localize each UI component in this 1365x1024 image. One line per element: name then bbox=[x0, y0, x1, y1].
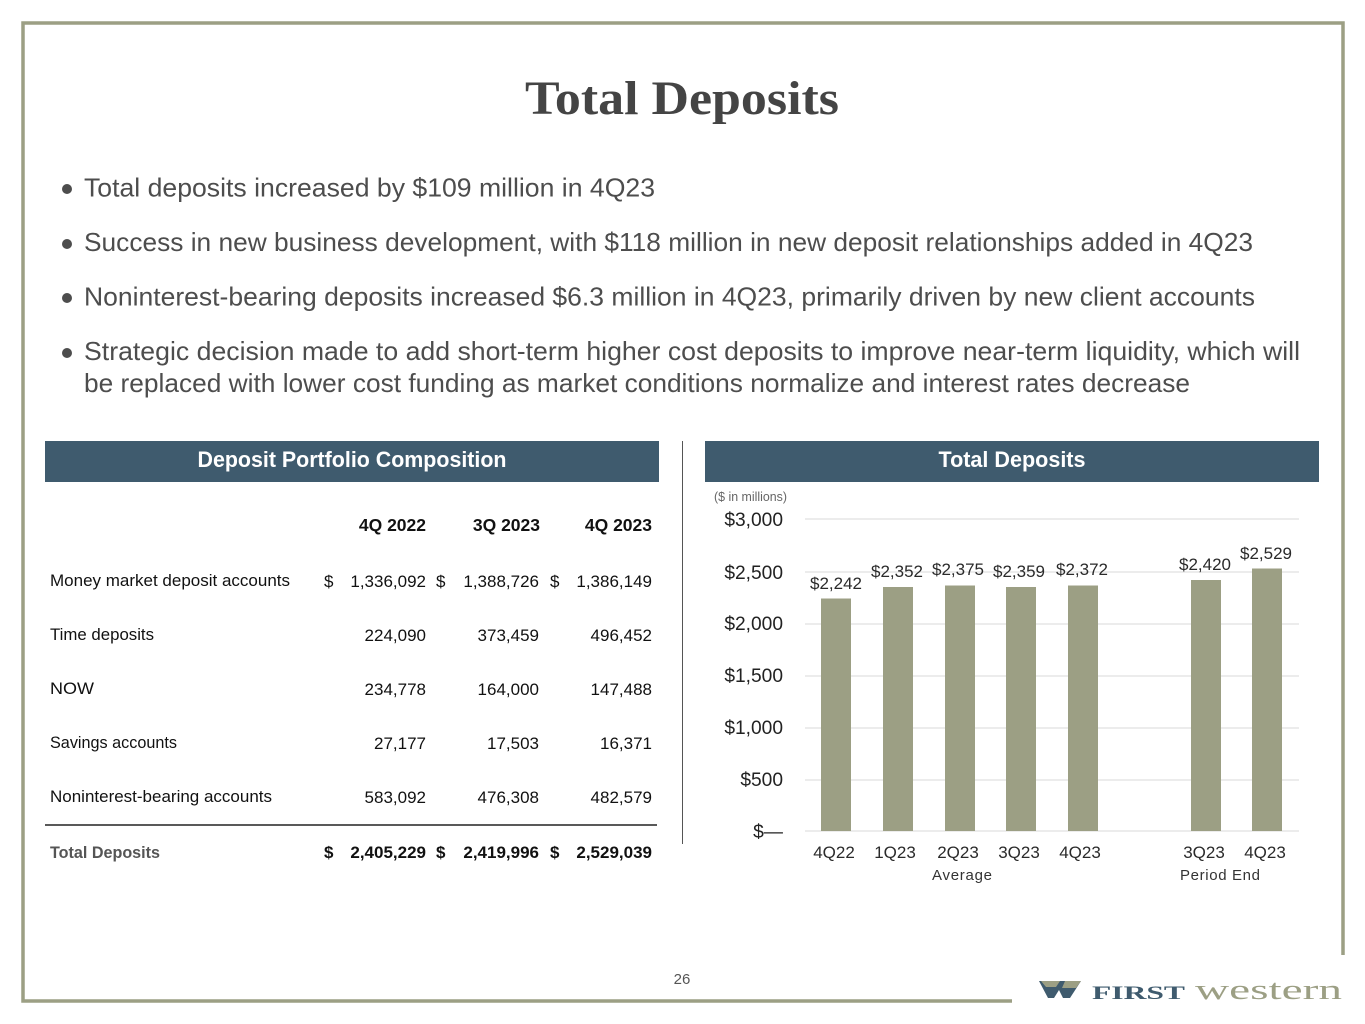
row: time deposits bbox=[50, 626, 652, 645]
y axis labels: $— bbox=[753, 822, 784, 843]
y axis labels: $1,000 bbox=[724, 718, 783, 739]
row: noninterest-bearing bbox=[50, 788, 652, 807]
logo wordmark: western bbox=[1195, 974, 1343, 1006]
bullet 3: Noninterest-bearing deposits increased $6.3 million in 4Q23, primarily driven by new client accounts bbox=[84, 282, 1255, 312]
bullet 4: Strategic decision made to add short-term higher cost deposits to improve near-term liquidity, which will bbox=[84, 336, 1300, 366]
row: savings: 17,503 bbox=[487, 734, 539, 753]
row: noninterest-bearing: 482,579 bbox=[591, 788, 652, 807]
bullet list bbox=[62, 172, 1300, 398]
panel header: Total Deposits bbox=[938, 447, 1086, 472]
bullet 2: Success in new business development, with $118 million in new deposit relationships added in 4Q23 bbox=[84, 227, 1253, 257]
y axis labels bbox=[724, 510, 784, 843]
row: money market: $ bbox=[324, 572, 334, 591]
row: total deposits: $ bbox=[436, 843, 446, 862]
bar value labels: $2,359 bbox=[993, 562, 1045, 581]
row: total deposits: $ bbox=[324, 843, 334, 862]
x axis labels: 2Q23 bbox=[937, 843, 979, 862]
y axis labels: $500 bbox=[740, 770, 783, 791]
row: money market: 1,336,092 bbox=[350, 572, 426, 591]
y axis labels: $2,500 bbox=[724, 563, 783, 584]
row: noninterest-bearing: Noninterest-bearing accounts bbox=[50, 788, 272, 806]
row: money market: Money market deposit accounts bbox=[50, 572, 290, 590]
bullet 4 bbox=[62, 336, 1300, 398]
logo: First Western bbox=[1039, 974, 1343, 1006]
logo wordmark: FIRST bbox=[1092, 983, 1186, 1004]
bar value labels: $2,529 bbox=[1240, 544, 1292, 563]
row: time deposits: 373,459 bbox=[478, 626, 539, 645]
bar value labels: $2,242 bbox=[810, 574, 862, 593]
logo wordmark bbox=[1092, 974, 1343, 1006]
bar value labels: $2,372 bbox=[1056, 560, 1108, 579]
panel: deposit portfolio composition bbox=[45, 441, 659, 862]
bullet 1: Total deposits increased by $109 million in 4Q23 bbox=[84, 172, 655, 202]
row: savings: 16,371 bbox=[600, 734, 652, 753]
row: NOW: 234,778 bbox=[365, 680, 426, 699]
row: savings bbox=[50, 734, 652, 753]
row: total deposits bbox=[50, 843, 652, 862]
bar value labels: $2,420 bbox=[1179, 555, 1231, 574]
row: NOW: 164,000 bbox=[478, 680, 539, 699]
x axis labels: 4Q23 bbox=[1059, 843, 1101, 862]
x axis labels: 1Q23 bbox=[874, 843, 916, 862]
panel header bbox=[705, 441, 1319, 482]
row: total deposits: Total Deposits bbox=[50, 844, 160, 862]
x axis labels: 3Q23 bbox=[1183, 843, 1225, 862]
x axis labels: 3Q23 bbox=[998, 843, 1040, 862]
row: total deposits: $ bbox=[550, 843, 560, 862]
row: time deposits: Time deposits bbox=[50, 626, 154, 644]
row: noninterest-bearing: 476,308 bbox=[478, 788, 539, 807]
x axis labels: 4Q22 bbox=[813, 843, 855, 862]
axis group: average: Average bbox=[932, 867, 992, 884]
bar value labels bbox=[810, 544, 1292, 593]
panel header: Deposit Portfolio Composition bbox=[198, 447, 506, 472]
x axis labels: 4Q23 bbox=[1244, 843, 1286, 862]
y axis labels: $3,000 bbox=[724, 510, 783, 531]
bars bbox=[821, 568, 1282, 831]
row: money market: 1,386,149 bbox=[576, 572, 652, 591]
row: total deposits: 2,419,996 bbox=[463, 843, 539, 862]
table column headers: 4Q 2022 bbox=[359, 515, 426, 535]
row: money market bbox=[50, 572, 652, 591]
row: savings: Savings accounts bbox=[50, 734, 177, 752]
row: money market: $ bbox=[436, 572, 446, 591]
row: noninterest-bearing: 583,092 bbox=[365, 788, 426, 807]
logo mark bbox=[1039, 981, 1081, 998]
table column headers: 4Q 2023 bbox=[585, 515, 652, 535]
bar value labels: $2,352 bbox=[871, 562, 923, 581]
row: money market: 1,388,726 bbox=[463, 572, 539, 591]
panel: total deposits chart bbox=[705, 441, 1319, 884]
axis group: period end: Period End bbox=[1180, 867, 1260, 884]
bullet 4: be replaced with lower cost funding as market conditions normalize and interest rates decrease bbox=[84, 368, 1190, 398]
row: time deposits: 496,452 bbox=[591, 626, 652, 645]
y axis labels: $2,000 bbox=[724, 614, 783, 635]
row: money market: $ bbox=[550, 572, 560, 591]
y axis labels: $1,500 bbox=[724, 666, 783, 687]
panel header bbox=[45, 441, 659, 482]
bar value labels: $2,375 bbox=[932, 560, 984, 579]
units note: ($ in millions) bbox=[714, 489, 787, 504]
table column headers: 3Q 2023 bbox=[473, 515, 540, 535]
title: Total Deposits bbox=[525, 72, 839, 125]
row: total deposits: 2,529,039 bbox=[576, 843, 652, 862]
row: NOW bbox=[50, 680, 652, 699]
x axis labels bbox=[813, 843, 1286, 862]
table column headers bbox=[359, 515, 652, 535]
page number: 26 bbox=[674, 971, 690, 988]
row: total deposits: 2,405,229 bbox=[350, 843, 426, 862]
row: time deposits: 224,090 bbox=[365, 626, 426, 645]
row: NOW: 147,488 bbox=[591, 680, 652, 699]
row: NOW: NOW bbox=[50, 680, 94, 698]
row: savings: 27,177 bbox=[374, 734, 426, 753]
